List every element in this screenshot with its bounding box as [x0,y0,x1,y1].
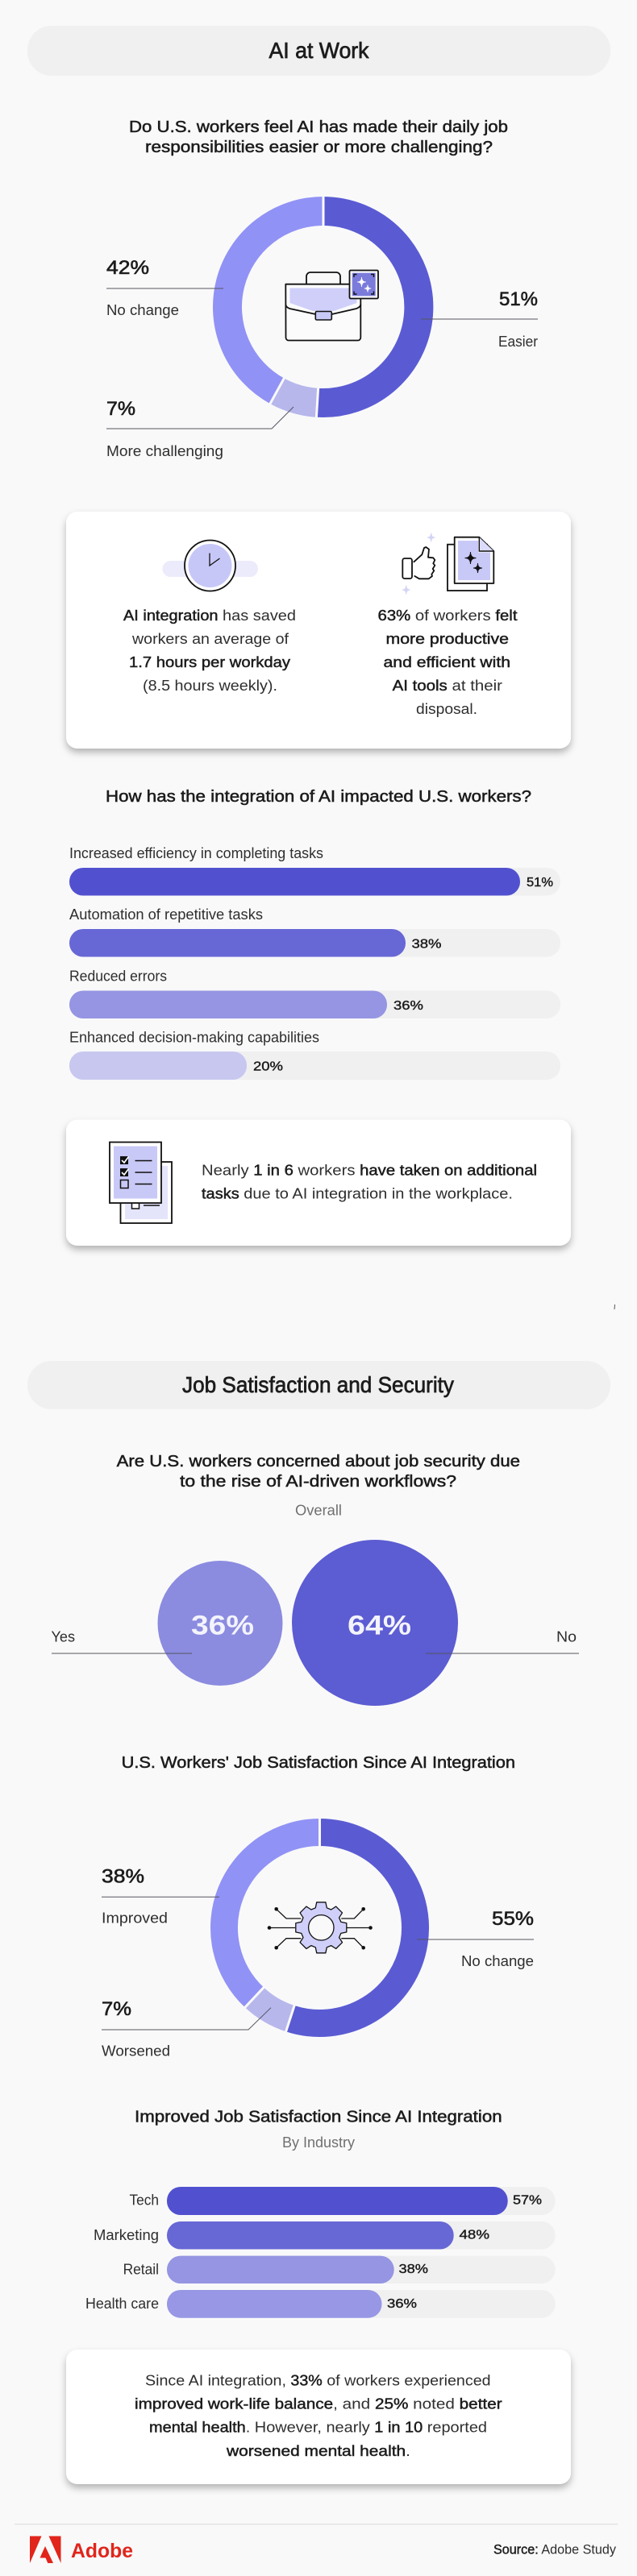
text: workers more productive: AI tools at their [393,677,502,694]
text: 1 in 6 workers: Nearly 1 in 6 workers have taken on additional [202,1162,537,1179]
bar: increased efficiency 51%: 51% [527,876,553,890]
bar: automation 38%: 38% [411,938,442,951]
text: mental health findings: Since AI integration, 33% of workers experienced [145,2371,491,2388]
section heading: Job Satisfaction and Security: Job Satisfaction and Security [182,1372,454,1397]
bar: marketing 48%: Marketing [94,2227,159,2243]
text: hours saved: (8.5 hours weekly). [143,677,277,694]
bar: health care 36%: 36% [387,2297,417,2311]
question heading: job security: to the rise of AI-driven workflows? [180,1473,456,1491]
bar: decision-making 20% [69,1030,560,1080]
label: 38% improved [102,1866,219,1927]
bubble: no 64% [292,1540,579,1706]
question heading: job security [117,1453,520,1491]
panel: time saved and productivity [66,512,571,749]
label: 7% worsened: Worsened [102,2043,170,2060]
bar: tech 57%: Tech [129,2192,159,2208]
section heading: Job Satisfaction and Security [27,1361,610,1409]
label: 55% no change: 55% [492,1908,534,1930]
panel: additional tasks callout [66,1120,571,1246]
label: 7% more challenging [106,398,294,459]
label: 51% easier [421,288,538,350]
bar: health care 36%: Health care [85,2296,159,2312]
text: workers more productive: 63% of workers felt [377,607,518,624]
bubble chart: job security concern [52,1540,579,1706]
bar: reduced errors 36%: 36% [393,999,423,1013]
label: 55% no change: No change [461,1952,534,1969]
donut chart: job satisfaction [224,1815,415,2035]
text: workers more productive: and efficient with [384,653,510,670]
question heading: easier or more challenging: Do U.S. workers feel AI has made their daily job [129,118,508,136]
donut chart: job responsibilities [227,193,418,421]
bubble: yes 36%: 36% [191,1610,254,1641]
label: 55% no change [417,1908,534,1969]
section: AI at Work [27,26,610,1246]
question heading: easier or more challenging [129,118,508,156]
icon: gear with circuit lines [268,1902,373,1953]
text: hours saved: AI integration has saved [123,607,296,624]
subheading: by industry: By Industry [282,2134,355,2151]
question heading: easier or more challenging: responsibilities easier or more challenging? [145,139,493,156]
footer: Adobe logo: Adobe [71,2540,133,2562]
bar: reduced errors 36% [69,969,560,1018]
bar: increased efficiency 51%: Increased efficiency in completing tasks [69,845,323,861]
section heading: AI at Work [27,26,610,76]
bar: retail 38%: 38% [398,2263,428,2276]
heading: impact of AI integration: How has the integration of AI impacted U.S. workers? [106,788,531,806]
bar: tech 57%: 57% [513,2193,542,2208]
icon: thumbs up and AI document [402,533,493,595]
text: workers more productive: disposal. [416,700,477,717]
bar: retail 38% [123,2256,556,2284]
heading: improved job satisfaction: Improved Job Satisfaction Since AI Integration [135,2108,502,2126]
heading: job satisfaction: U.S. Workers' Job Satisfaction Since AI Integration [122,1754,515,1772]
text: hours saved: 1.7 hours per workday [129,653,291,670]
bubble: no 64%: No [556,1629,577,1645]
section heading: AI at Work: AI at Work [269,38,369,63]
label: 51% easier: Easier [498,333,538,350]
label: 7% more challenging: 7% [106,398,135,420]
text: hours saved: workers an average of [131,630,289,647]
bubble: no 64%: 64% [348,1610,411,1641]
subheading: overall: Overall [295,1502,342,1518]
text: workers more productive: more productive [385,630,509,647]
bar: marketing 48%: 48% [460,2228,489,2242]
label: 38% improved: Improved [102,1910,168,1927]
bar: increased efficiency 51% [69,845,560,896]
label: 7% worsened [102,1998,271,2060]
bar: decision-making 20%: 20% [253,1060,283,1073]
bubble: yes 36%: Yes [52,1629,75,1645]
text: mental health findings: improved work-life balance , and 25% noted better [135,2395,502,2412]
label: 51% easier: 51% [499,288,538,310]
label: 7% worsened: 7% [102,1998,131,2020]
bar: retail 38%: Retail [123,2261,159,2277]
bar: automation 38%: Automation of repetitive tasks [69,906,263,923]
footer: Adobe logo [30,2537,133,2563]
bar chart: satisfaction by industry [85,2187,556,2318]
text: hours saved [123,607,296,694]
section: Job Satisfaction and Security [27,1361,610,2484]
panel: work-life balance and mental health [66,2350,571,2484]
bar: marketing 48% [94,2221,556,2250]
icon: checklist documents [110,1143,172,1223]
footer: source: Source: Adobe Study [493,2541,616,2557]
bar: health care 36% [85,2290,556,2318]
label: 42% no change: No change [106,301,179,318]
text: mental health findings [135,2371,502,2459]
bar: tech 57% [129,2187,556,2215]
bar: decision-making 20%: Enhanced decision-making capabilities [69,1030,319,1046]
icon: clock [163,540,258,591]
text: mental health findings: mental health . However, nearly 1 in 10 reported [149,2419,487,2436]
label: 42% no change: 42% [106,257,149,279]
label: 42% no change [106,257,223,318]
bar chart: AI impact on workers [69,845,560,1080]
label: 38% improved: 38% [102,1866,144,1888]
bar: reduced errors 36%: Reduced errors [69,969,167,985]
bubble: yes 36% [52,1561,282,1686]
label: 7% more challenging: More challenging [106,442,223,459]
text: workers more productive [377,607,518,717]
text: 1 in 6 workers: tasks due to AI integration in the workplace. [202,1185,513,1202]
question heading: job security: Are U.S. workers concerned about job security due [117,1453,520,1471]
text: mental health findings: worsened mental health . [226,2442,410,2459]
text: 1 in 6 workers [202,1162,537,1202]
bar: automation 38% [69,906,560,957]
icon: briefcase with AI badge [285,271,378,341]
